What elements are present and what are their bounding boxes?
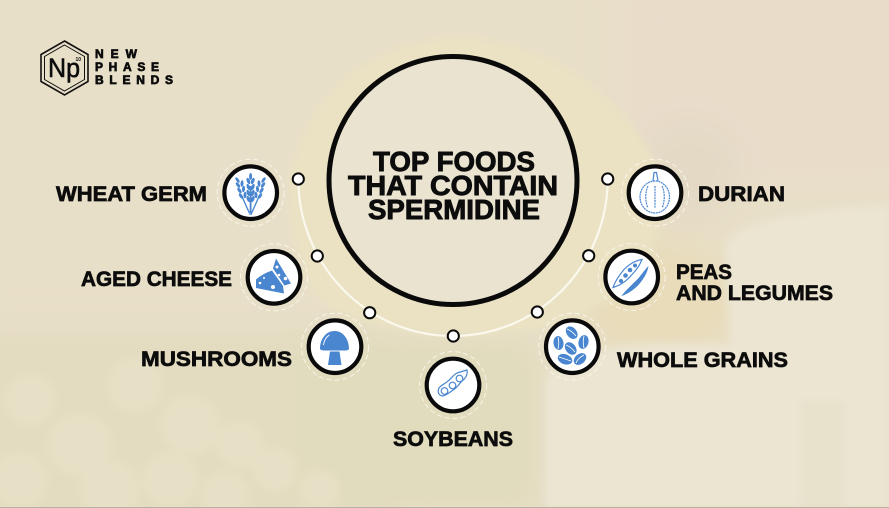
- logo wordmark: PHASE: [95, 60, 159, 74]
- item: whole grains: [532, 306, 788, 380]
- label: AGED CHEESE: [81, 268, 232, 291]
- icon: wheat: [217, 159, 284, 226]
- label: [676, 261, 833, 305]
- connector dot: [448, 330, 459, 342]
- title: SPERMIDINE: [368, 194, 540, 225]
- item: soybeans: [393, 330, 513, 451]
- item: peas and legumes: [583, 244, 833, 310]
- label: PEAS: [676, 261, 732, 284]
- icon: soybean pod: [420, 352, 486, 418]
- icon: hexagon Np mark: [41, 41, 88, 95]
- logo wordmark: [95, 47, 173, 87]
- title: [348, 146, 558, 225]
- yellow fruit behind the circle: [290, 38, 662, 335]
- label: SOYBEANS: [393, 428, 513, 451]
- bottom edge: [0, 507, 889, 508]
- logo: New Phase Blends: [41, 41, 173, 95]
- connector dot: [293, 173, 304, 185]
- item: durian: [602, 159, 785, 226]
- icon: mushroom: [302, 313, 368, 380]
- logo wordmark: NEW: [95, 47, 138, 61]
- connector dot: [312, 250, 323, 262]
- item: wheat germ: [56, 159, 304, 226]
- title: TOP FOODS: [373, 146, 535, 177]
- logo wordmark: BLENDS: [95, 73, 173, 87]
- connector dot: [583, 250, 594, 261]
- connector arc: [298, 179, 608, 336]
- icon: hexagon Np mark: 10: [76, 57, 81, 63]
- icon: hexagon Np mark: Np: [48, 53, 80, 83]
- connector dot: [532, 306, 543, 318]
- label: DURIAN: [698, 183, 785, 206]
- item: mushrooms: [141, 307, 375, 380]
- title: THAT CONTAIN: [348, 170, 558, 201]
- label: WHEAT GERM: [56, 183, 207, 206]
- item: aged cheese: [81, 244, 323, 311]
- label: WHOLE GRAINS: [617, 349, 788, 372]
- icon: durian: [622, 159, 688, 226]
- icon: pea pods: [598, 244, 665, 310]
- icon: cheese: [240, 244, 308, 311]
- connector dot: [602, 173, 613, 185]
- label: AND LEGUMES: [676, 282, 833, 305]
- connector dot: [364, 307, 375, 318]
- central circle with title: [329, 56, 577, 304]
- icon: grains: [539, 313, 606, 380]
- label: MUSHROOMS: [141, 348, 292, 371]
